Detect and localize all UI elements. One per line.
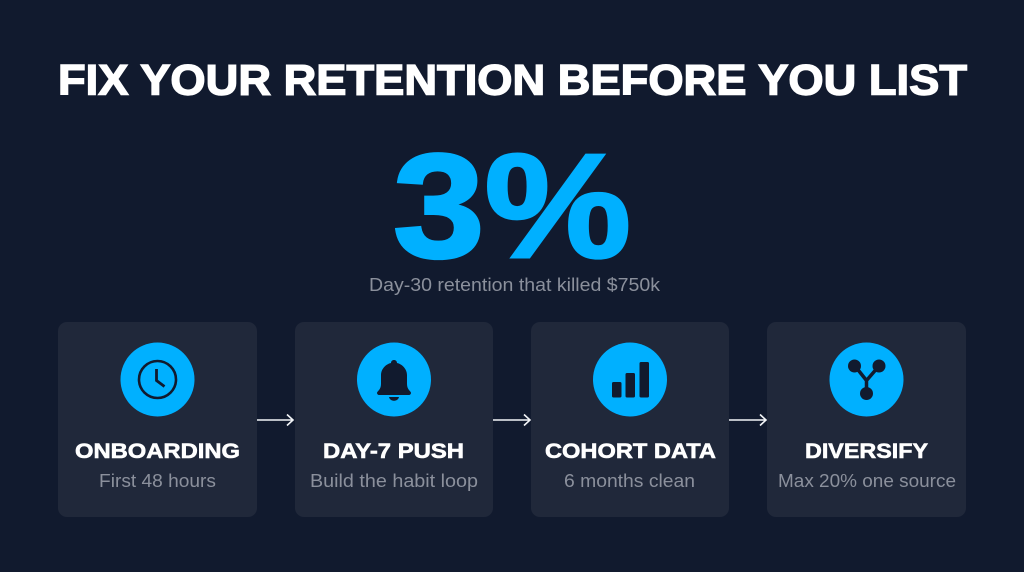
- stat caption: Day-30 retention that killed $750k: [369, 274, 661, 295]
- panel: day-7 push: [295, 322, 493, 517]
- arrow: cohort data to diversify: [729, 414, 766, 426]
- heading: cohort data: COHORT DATA: [545, 440, 716, 463]
- icon: branching nodes: [830, 342, 904, 416]
- panel: diversify: [767, 322, 966, 517]
- text: max 20% one source: Max 20% one source: [778, 471, 956, 491]
- heading: day-7 push: DAY-7 PUSH: [323, 440, 464, 463]
- heading: diversify: DIVERSIFY: [805, 440, 928, 463]
- panel: cohort data: [531, 322, 729, 517]
- icon: bell: [357, 342, 431, 416]
- heading: onboarding: ONBOARDING: [75, 440, 240, 463]
- icon: bar chart: [593, 342, 667, 416]
- text: build the habit loop: Build the habit loop: [310, 471, 478, 491]
- big stat: 3%: 3%: [393, 124, 631, 289]
- icon: clock: [120, 342, 194, 416]
- text: 6 months clean: 6 months clean: [564, 471, 695, 491]
- title: FIX YOUR RETENTION BEFORE YOU LIST: [58, 56, 967, 104]
- text: first 48 hours: First 48 hours: [99, 471, 216, 491]
- panel: onboarding: [58, 322, 257, 517]
- arrow: day-7 push to cohort data: [493, 414, 530, 426]
- arrow: onboarding to day-7 push: [257, 414, 293, 426]
